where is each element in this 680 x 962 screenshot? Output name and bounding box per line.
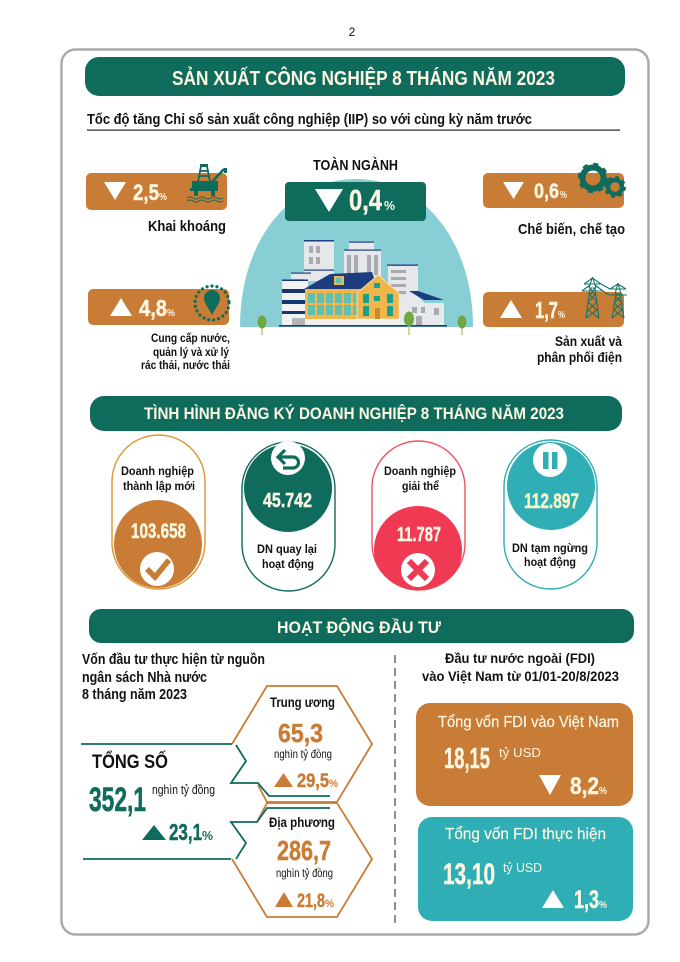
card: realised FDI: tỷ USD	[503, 860, 542, 875]
label: water and waste	[141, 331, 230, 372]
stat: total: 352,1	[89, 781, 146, 819]
icon: water pin	[195, 286, 229, 320]
card: total FDI into Vietnam: %	[599, 786, 607, 797]
hexagon: local: Địa phương	[269, 814, 335, 830]
card: dissolved enterprises: Doanh nghiệp	[384, 464, 456, 478]
icon: cross	[401, 553, 435, 587]
stat: manufacturing -0.6%: 0,6	[534, 180, 559, 203]
hexagon: local: 21,8	[297, 891, 325, 912]
card: suspended enterprises: hoạt động	[524, 555, 576, 569]
card: suspended enterprises	[504, 440, 597, 589]
stat: overall -0.4%: %	[384, 198, 395, 213]
label: electricity: phân phối điện	[537, 349, 622, 365]
icon: gears	[580, 164, 624, 196]
hexagon: local: %	[325, 898, 334, 910]
hexagon: central: nghìn tỷ đồng	[274, 747, 332, 761]
panel: investment	[81, 609, 634, 925]
illustration: city dome	[240, 179, 473, 335]
label: mining: Khai khoáng	[148, 218, 226, 235]
hexagon: central: 65,3	[278, 718, 323, 748]
label: overall: TOÀN NGÀNH	[313, 157, 398, 174]
stat: electricity +1.7%: 1,7	[535, 297, 558, 323]
subheading: IIP growth: Tốc độ tăng Chỉ số sản xuất công nghiệp (IIP) so với cùng kỳ năm trước	[87, 111, 532, 128]
card: new enterprises: Doanh nghiệp	[121, 464, 194, 478]
stat: total: %	[202, 828, 213, 843]
trees	[258, 312, 466, 335]
label: water and waste: quản lý và xử lý	[153, 345, 229, 359]
yellow gable house	[357, 275, 402, 325]
dashed divider	[394, 655, 396, 925]
stat: manufacturing -0.6%: %	[560, 190, 567, 201]
stat: mining -2.5%: 2,5	[133, 180, 159, 205]
stat: total: nghìn tỷ đồng	[152, 783, 215, 797]
striped building	[282, 280, 308, 325]
card: total FDI into Vietnam: 18,15	[444, 743, 490, 775]
hexagon: local: nghìn tỷ đồng	[276, 866, 333, 880]
card: returning enterprises	[242, 441, 335, 591]
icon: oil rig	[187, 164, 227, 202]
card: realised FDI	[418, 817, 633, 921]
card: new enterprises	[112, 435, 205, 589]
card: realised FDI: 13,10	[443, 858, 495, 891]
label: manufacturing: Chế biến, chế tạo	[518, 221, 625, 238]
heading: business registration	[90, 396, 622, 431]
card: new enterprises: thành lập mới	[123, 479, 195, 493]
text: state budget capital	[82, 652, 265, 703]
stat: electricity +1.7%	[483, 277, 627, 327]
icon: pause	[533, 443, 567, 477]
grey tower middle	[344, 242, 381, 280]
text: state budget capital: Vốn đầu tư thực hiện từ nguồn	[82, 652, 265, 668]
stat: total	[89, 751, 215, 845]
grey tower left	[291, 240, 334, 281]
small white house	[400, 291, 444, 325]
card: suspended enterprises: 112.897	[524, 490, 579, 513]
card: realised FDI: 1,3	[574, 886, 599, 914]
card: dissolved enterprises	[372, 441, 465, 594]
icon: power pylons	[582, 277, 627, 318]
heading: investment	[89, 609, 634, 643]
stat: overall -0.4%	[285, 182, 426, 221]
card: total FDI into Vietnam: 8,2	[570, 773, 599, 800]
hexagon: central: Trung ương	[270, 694, 335, 710]
stat: total: 23,1	[169, 819, 202, 845]
panel: industrial production	[85, 57, 627, 372]
stat: manufacturing -0.6%	[483, 164, 624, 208]
icon: check	[140, 552, 174, 586]
label: electricity: Sản xuất và	[555, 333, 622, 349]
label: water and waste: Cung cấp nước,	[151, 331, 230, 345]
label: water and waste: rác thải, nước thải	[141, 358, 230, 372]
grey tower right	[387, 264, 418, 320]
hexagon: local	[232, 803, 372, 917]
connector lines	[81, 744, 330, 859]
card: realised FDI: %	[599, 900, 607, 911]
card: returning enterprises: 45.742	[263, 490, 312, 512]
hexagon: central	[232, 686, 372, 802]
card: returning enterprises: DN quay lại	[257, 542, 317, 556]
card: new enterprises: 103.658	[131, 520, 186, 543]
main yellow building	[304, 272, 378, 325]
hexagon: central: 29,5	[297, 771, 329, 792]
stat: water and waste +4.8%	[88, 286, 229, 325]
hexagon: local: 286,7	[277, 835, 331, 866]
stat: mining -2.5%: %	[159, 192, 167, 203]
panel: business registration	[90, 396, 622, 594]
card: total FDI into Vietnam: tỷ USD	[499, 745, 541, 760]
icon: return arrow	[271, 441, 305, 475]
heading: business registration: TÌNH HÌNH ĐĂNG KÝ DOANH NGHIỆP 8 THÁNG NĂM 2023	[144, 404, 564, 423]
stat: water and waste +4.8%: 4,8	[139, 295, 167, 321]
text: state budget capital: 8 tháng năm 2023	[82, 687, 187, 703]
stat: total: TỔNG SỐ	[92, 751, 168, 773]
text: FDI heading: Đầu tư nước ngoài (FDI)	[445, 650, 595, 666]
page frame	[62, 50, 648, 934]
page number: 2	[349, 25, 356, 39]
card: returning enterprises: hoạt động	[262, 557, 314, 571]
card: total FDI into Vietnam	[416, 703, 633, 806]
stat: mining -2.5%	[86, 164, 227, 210]
card: realised FDI: Tổng vốn FDI thực hiện	[445, 825, 606, 843]
text: state budget capital: ngân sách Nhà nước	[82, 670, 207, 686]
stat: water and waste +4.8%: %	[167, 308, 175, 319]
heading: investment: HOẠT ĐỘNG ĐẦU TƯ	[277, 618, 442, 637]
card: total FDI into Vietnam: Tổng vốn FDI vào Việt Nam	[438, 713, 619, 731]
text: FDI heading	[422, 650, 619, 684]
heading: industrial production	[85, 57, 625, 96]
stat: electricity +1.7%: %	[558, 310, 565, 321]
hexagon: central: %	[329, 778, 338, 790]
stat: overall -0.4%: 0,4	[349, 185, 382, 217]
label: electricity	[537, 333, 622, 365]
heading: industrial production: SẢN XUẤT CÔNG NGHIỆP 8 THÁNG NĂM 2023	[172, 66, 555, 90]
text: FDI heading: vào Việt Nam từ 01/01-20/8/2023	[422, 668, 619, 684]
card: dissolved enterprises: giải thể	[402, 479, 439, 493]
card: dissolved enterprises: 11.787	[397, 524, 441, 546]
card: suspended enterprises: DN tạm ngừng	[512, 541, 588, 555]
